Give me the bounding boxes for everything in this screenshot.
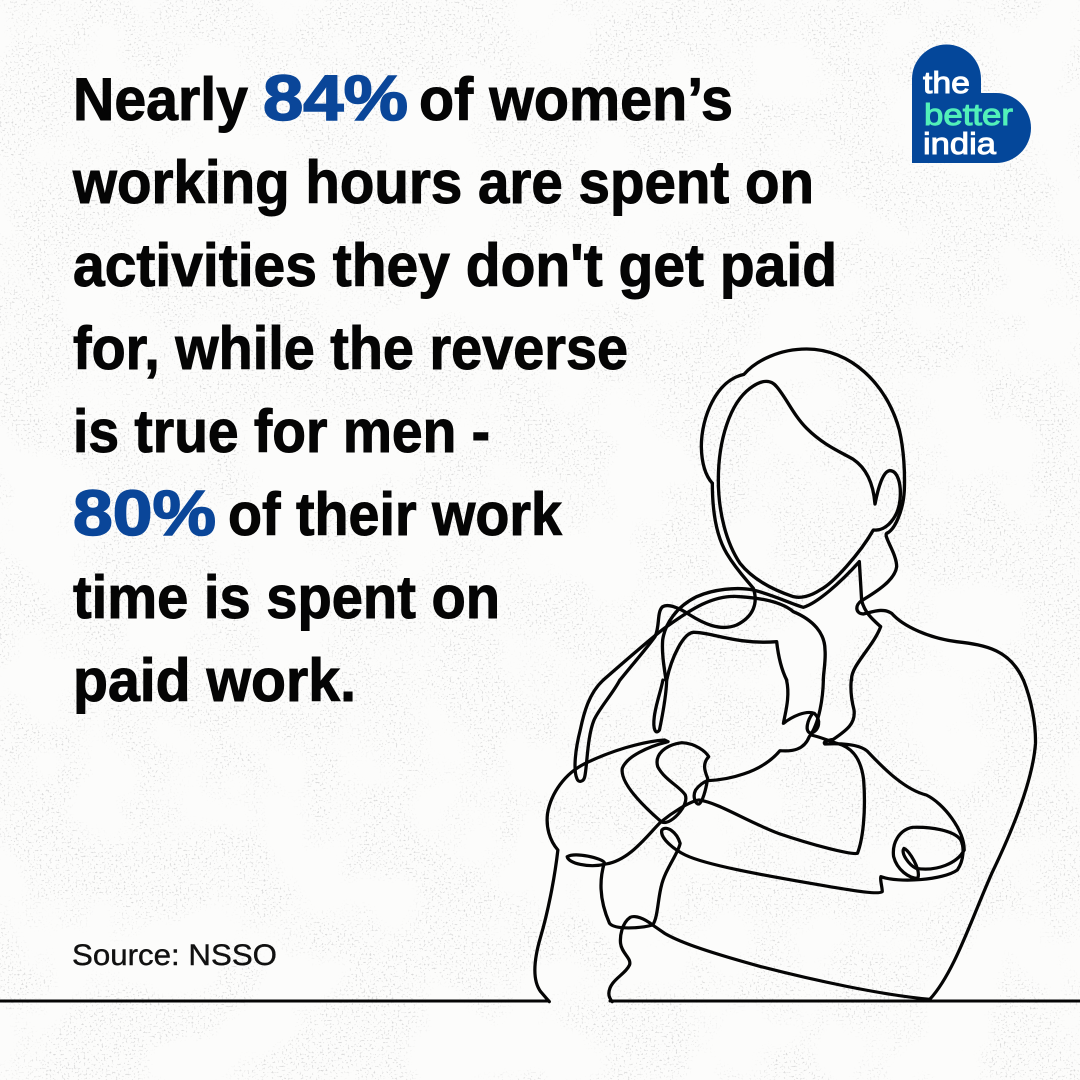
mother's head and neck xyxy=(603,349,1023,680)
logo: the better india heart xyxy=(912,44,1031,163)
headline text: for, while the reverse xyxy=(73,315,628,382)
headline text: working hours are spent on xyxy=(72,149,814,216)
headline text: is true for men - xyxy=(73,398,490,465)
ground line xyxy=(0,1000,1080,1002)
headline text: Nearly xyxy=(73,66,249,133)
headline text: of their work xyxy=(228,481,563,548)
headline text xyxy=(72,62,837,714)
logo: the better india heart: the xyxy=(923,65,970,100)
mother's arms and child xyxy=(535,680,1036,1002)
headline text: time is spent on xyxy=(73,564,500,631)
logo: the better india heart: india xyxy=(923,126,997,161)
highlighted figure: 84%: 84% xyxy=(263,62,408,134)
illustration: line art of mother holding child xyxy=(0,349,1080,1002)
source note: Source: NSSO xyxy=(72,939,277,972)
headline text: of women’s xyxy=(419,66,733,133)
highlighted figure: 80%: 80% xyxy=(73,477,216,549)
logo: the better india heart: better xyxy=(924,97,1013,132)
headline text: paid work. xyxy=(73,647,356,714)
headline text: activities they don't get paid xyxy=(73,232,837,299)
